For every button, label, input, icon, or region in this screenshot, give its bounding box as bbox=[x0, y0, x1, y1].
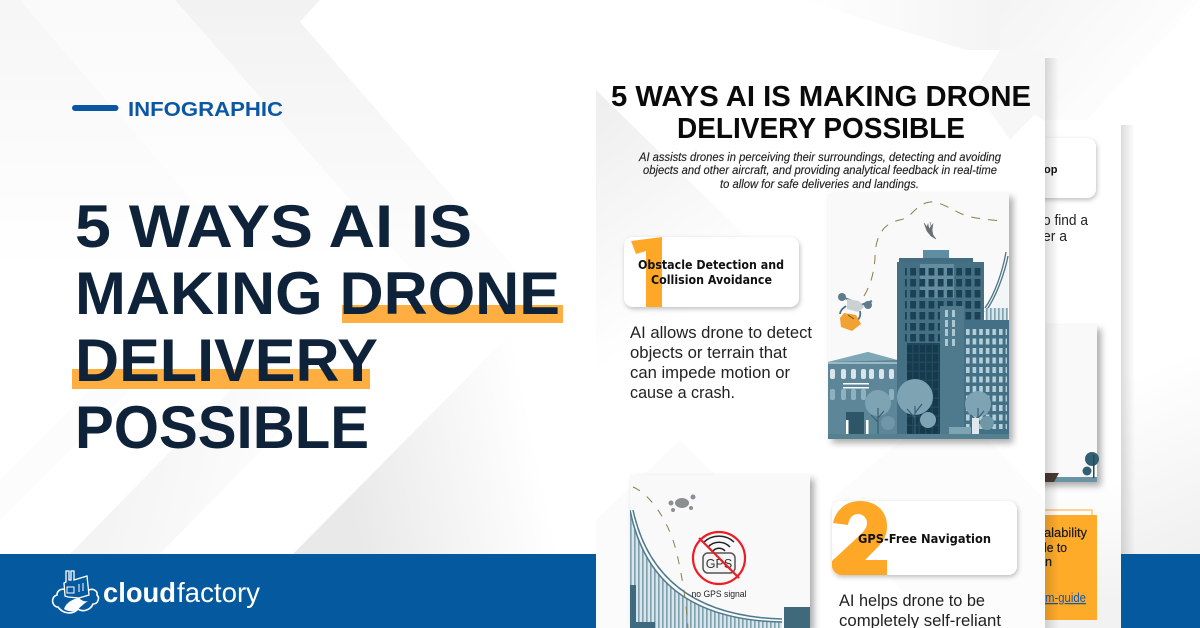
grey drone bbox=[668, 494, 696, 512]
icon: factory cloud bbox=[53, 571, 98, 613]
step 3 body text: o find a bbox=[1043, 212, 1089, 229]
blue footer band bbox=[0, 554, 1200, 628]
step 1 card bbox=[624, 237, 799, 307]
step 2 body text: AI helps drone to be bbox=[839, 592, 985, 610]
page intro text: AI assists drones in perceiving their surroundings, detecting and avoiding bbox=[638, 150, 1001, 164]
page intro text: to allow for safe deliveries and landings. bbox=[720, 177, 919, 191]
step 2 body text bbox=[839, 592, 1001, 628]
panel: back infographic page bbox=[1000, 125, 1135, 628]
bridge bbox=[985, 252, 1008, 322]
numeral 2 bbox=[832, 501, 887, 575]
step 3 body text: er a bbox=[1043, 228, 1068, 245]
orange call-to-action note: alability bbox=[1044, 526, 1088, 540]
orange call-to-action note: le to bbox=[1044, 541, 1067, 555]
page intro text bbox=[638, 150, 1001, 191]
illustration: no GPS signal bbox=[630, 475, 810, 628]
illustration: drone over city bbox=[828, 193, 1009, 439]
step 1 card: Obstacle Detection and bbox=[638, 257, 784, 272]
step 3 card bbox=[1000, 138, 1096, 198]
package bbox=[840, 313, 861, 331]
eyebrow: infographic: INFOGRAPHIC bbox=[128, 99, 283, 121]
main heading: 5 WAYS AI IS bbox=[75, 193, 472, 260]
icon: no GPS bbox=[693, 532, 745, 584]
step 3 illustration bbox=[1000, 325, 1099, 482]
main heading bbox=[75, 193, 560, 461]
page title bbox=[611, 81, 1031, 145]
main heading: POSSIBLE bbox=[75, 394, 369, 461]
left building bbox=[828, 352, 897, 436]
orange call-to-action note: m-guide bbox=[1045, 591, 1086, 605]
orange highlight behind drone bbox=[342, 305, 563, 323]
step 1 body text: cause a crash. bbox=[630, 384, 735, 402]
no GPS caption: no GPS signal bbox=[692, 589, 746, 600]
step 3 card: op bbox=[1044, 164, 1058, 176]
icon: no GPS: GPS bbox=[706, 557, 732, 571]
trees bbox=[865, 379, 994, 436]
page title: DELIVERY POSSIBLE bbox=[677, 113, 965, 145]
wordmark bbox=[103, 577, 260, 608]
eyebrow: infographic bbox=[72, 99, 283, 121]
step 2 card: GPS-Free Navigation bbox=[858, 531, 991, 546]
step 1 card: Collision Avoidance bbox=[651, 272, 772, 287]
step 1 body text bbox=[630, 324, 812, 402]
step 1 body text: objects or terrain that bbox=[630, 344, 787, 362]
logo: cloudfactory bbox=[53, 571, 260, 613]
right building bbox=[964, 320, 1009, 436]
numeral 1 bbox=[631, 237, 662, 307]
flight path bbox=[864, 202, 1003, 296]
step 1 body text: AI allows drone to detect bbox=[630, 324, 812, 342]
wordmark: factory bbox=[177, 577, 260, 608]
step 2 card bbox=[832, 501, 1017, 575]
page intro text: objects and other aircraft, and providing analytical feedback in real-time bbox=[643, 163, 997, 177]
panel: front infographic page bbox=[596, 50, 1059, 628]
page title: 5 WAYS AI IS MAKING DRONE bbox=[611, 81, 1031, 113]
step 3 body text bbox=[1043, 212, 1089, 245]
ground bbox=[828, 434, 1009, 439]
drone carrying package bbox=[838, 293, 872, 331]
main heading: MAKING DRONE bbox=[75, 260, 560, 327]
flight path bbox=[633, 487, 688, 628]
main heading: DELIVERY bbox=[75, 327, 378, 394]
orange highlight behind delivery bbox=[72, 369, 370, 389]
orange call-to-action note: n bbox=[1045, 555, 1052, 569]
step 1 body text: can impede motion or bbox=[630, 364, 791, 382]
bridge curve bbox=[630, 500, 810, 628]
main tower bbox=[897, 250, 984, 436]
wordmark: cloud bbox=[103, 577, 176, 608]
birds bbox=[924, 222, 936, 239]
orange call-to-action note bbox=[1000, 510, 1097, 620]
